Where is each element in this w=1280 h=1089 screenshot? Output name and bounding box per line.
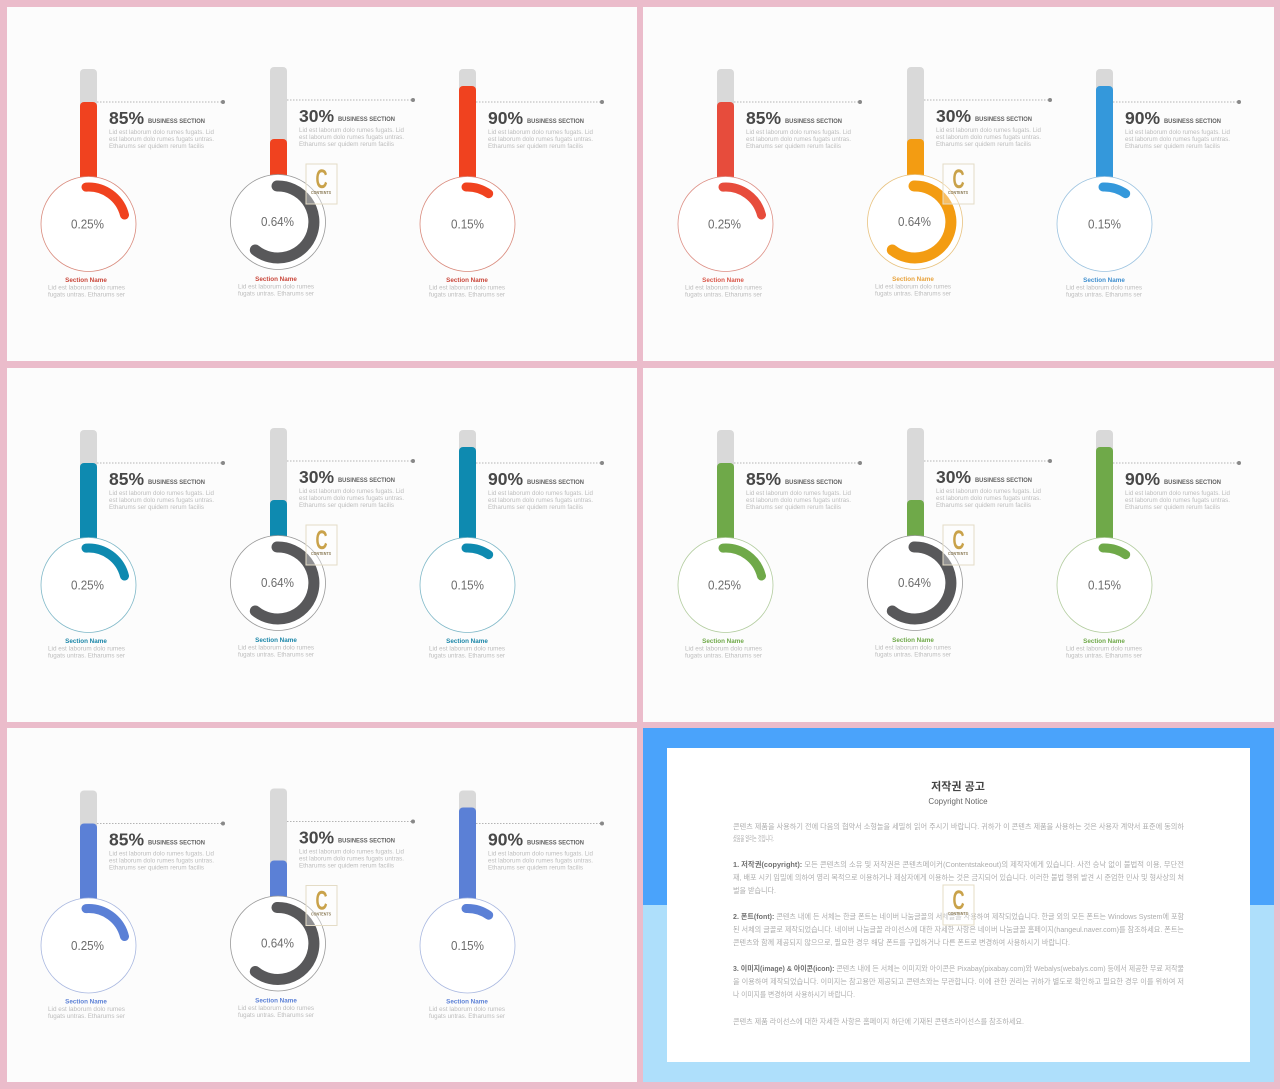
section caption: Section Name	[702, 638, 744, 645]
section caption	[875, 276, 951, 298]
thermometer tube	[1096, 430, 1113, 542]
stat text: Lid est laborum dolo rumes fugats. Lid	[488, 129, 593, 136]
gauge: 90%	[1057, 69, 1241, 298]
section caption: fugats untras. Etharums ser	[238, 652, 314, 658]
stat text: Lid est laborum dolo rumes fugats. Lid	[936, 488, 1041, 495]
clause 1: 1. 저작권(copyright): 모든 콘텐츠의 소유 및 저작권은 콘텐츠메이커(Contentstakeout)의 제작자에게 있습니다. 사전 승낙 없이 불법적 이용, 무단전	[733, 860, 1184, 869]
section caption: fugats untras. Etharums ser	[875, 290, 951, 298]
thermometer tube	[907, 428, 924, 540]
section caption: Section Name	[446, 998, 488, 1006]
stat text: Etharums ser quidem rerum facilis	[299, 141, 394, 148]
panel: teal slide	[7, 368, 637, 722]
stat text	[936, 106, 1041, 148]
stat text: Lid est laborum dolo rumes fugats. Lid	[1125, 490, 1230, 497]
section caption	[1066, 277, 1142, 298]
stat text: 85%	[109, 108, 144, 128]
stat text: est laborum dolo rumes fugats untras.	[488, 497, 593, 504]
stat text	[109, 469, 214, 511]
gauge: 90%	[1057, 430, 1241, 660]
dial: 0.25%	[71, 578, 104, 592]
section caption: Lid est laborum dolo rumes	[685, 646, 762, 652]
section caption: fugats untras. Etharums ser	[1066, 292, 1142, 298]
stat text: est laborum dolo rumes fugats untras.	[299, 495, 404, 502]
section caption	[685, 277, 762, 298]
dial: 0.15%	[1088, 578, 1121, 592]
stat text	[488, 469, 593, 511]
gauge: 30%	[230, 428, 415, 658]
stat text: Lid est laborum dolo rumes fugats. Lid	[746, 490, 851, 497]
section caption: Section Name	[65, 638, 107, 645]
section caption: Section Name	[702, 277, 744, 284]
stat text: BUSINESS SECTION	[785, 480, 842, 486]
section caption: Section Name	[65, 277, 107, 284]
stat text	[488, 108, 593, 150]
intro paragraph	[733, 822, 1184, 843]
stat text: Lid est laborum dolo rumes fugats. Lid	[488, 490, 593, 497]
section caption	[48, 277, 125, 298]
thermometer tube	[270, 788, 287, 900]
section caption: Section Name	[255, 637, 297, 644]
dial: 0.25%	[71, 216, 104, 232]
stat text: BUSINESS SECTION	[338, 478, 395, 484]
dial	[420, 176, 515, 272]
dial: 0.64%	[261, 575, 294, 590]
stat text: 85%	[746, 469, 781, 489]
stat text: 30%	[936, 467, 971, 487]
stat text: 90%	[488, 830, 523, 850]
watermark badge	[306, 885, 337, 926]
section caption: fugats untras. Etharums ser	[685, 652, 762, 660]
heading: Copyright Notice	[928, 797, 988, 806]
dial	[868, 174, 962, 270]
watermark badge: CONTENTS	[311, 912, 331, 916]
panel: indigo slide	[7, 728, 637, 1082]
dial: 0.25%	[708, 216, 741, 232]
section caption: Lid est laborum dolo rumes	[238, 284, 314, 290]
dotted leader	[476, 461, 604, 465]
panel: copyright notice	[643, 728, 1274, 1082]
dial	[230, 536, 326, 630]
section caption: Section Name	[892, 276, 934, 283]
clause 2: 된 서체의 글꼴로 제작되었습니다. 네이버 나눔글꼴 라이선스에 대한 자세한 사항은 네이버 나눔글꼴 홈페이지(hangeul.naver.com)를 참조하세요. 폰트는	[733, 925, 1184, 934]
dotted leader	[734, 100, 862, 104]
section caption	[238, 276, 314, 298]
section caption: Lid est laborum dolo rumes	[48, 646, 125, 652]
thermometer tube	[907, 67, 924, 179]
stat text: BUSINESS SECTION	[527, 480, 584, 486]
section caption	[429, 998, 505, 1020]
stat text: Lid est laborum dolo rumes fugats. Lid	[109, 850, 214, 858]
section caption: Lid est laborum dolo rumes	[875, 644, 951, 652]
dial: 0.64%	[898, 214, 931, 229]
intro paragraph: 콘텐츠 제품을 사용하기 전에 다음의 협약서 소형놀을 세밀히 읽어 주시기 바랍니다. 귀하가 이 콘텐츠 제품을 사용하는 것은 사용자 계약서 표준에 동의하	[733, 822, 1184, 831]
gauge: 30%	[230, 788, 415, 1019]
section caption: Lid est laborum dolo rumes	[429, 1006, 505, 1013]
intro paragraph: 셨음을 알리는 것입니다.	[733, 834, 774, 843]
watermark badge	[306, 525, 337, 565]
watermark badge: C	[952, 164, 965, 194]
section caption: Lid est laborum dolo rumes	[1066, 646, 1142, 652]
section caption: fugats untras. Etharums ser	[48, 1013, 125, 1020]
stat text: Etharums ser quidem rerum facilis	[299, 862, 394, 870]
stat text: est laborum dolo rumes fugats untras.	[109, 858, 214, 864]
watermark badge: C	[316, 885, 328, 916]
stat text: Etharums ser quidem rerum facilis	[299, 502, 394, 509]
clause 2	[733, 912, 1184, 947]
stat text: BUSINESS SECTION	[338, 838, 395, 844]
dial	[230, 896, 326, 991]
watermark badge: CONTENTS	[311, 190, 331, 195]
stat text: BUSINESS SECTION	[148, 840, 205, 846]
section caption	[238, 998, 314, 1019]
clause 1: 재, 배포 시키 임밀에 의하여 영리 목적으로 이용하거나 제삼자에게 이용하는 것은 금지되어 있습니다. 이러한 불법 행위 발견 시 준엄한 민사 및 형사상의 처	[733, 873, 1184, 882]
section caption: Section Name	[1083, 638, 1125, 645]
dotted leader	[1113, 100, 1241, 104]
section caption: fugats untras. Etharums ser	[238, 1012, 314, 1019]
section caption: Section Name	[255, 998, 297, 1004]
stat text	[109, 108, 214, 150]
stat text: est laborum dolo rumes fugats untras.	[746, 136, 851, 143]
watermark badge	[306, 164, 337, 204]
stat text: 90%	[1125, 469, 1160, 489]
stat text	[936, 467, 1041, 509]
section caption: fugats untras. Etharums ser	[48, 292, 125, 298]
stat text	[746, 108, 851, 150]
stat text: est laborum dolo rumes fugats untras.	[299, 134, 404, 141]
thermometer tube	[459, 790, 476, 902]
dial	[868, 536, 962, 630]
section caption: Lid est laborum dolo rumes	[238, 1005, 314, 1012]
stat text: est laborum dolo rumes fugats untras.	[936, 495, 1041, 502]
section caption: fugats untras. Etharums ser	[238, 290, 314, 298]
section caption: fugats untras. Etharums ser	[875, 652, 951, 658]
stat text: BUSINESS SECTION	[148, 119, 205, 125]
watermark badge	[943, 525, 974, 565]
section caption	[429, 638, 505, 660]
stat text: 90%	[488, 469, 523, 489]
dotted leader	[1113, 461, 1241, 465]
stat text	[299, 106, 404, 148]
gauge: 85%	[678, 69, 862, 298]
watermark badge: CONTENTS	[948, 551, 968, 556]
watermark badge: CONTENTS	[311, 551, 331, 556]
stat text: Lid est laborum dolo rumes fugats. Lid	[1125, 129, 1230, 136]
stat text: 85%	[746, 108, 781, 128]
stat text: Etharums ser quidem rerum facilis	[746, 504, 841, 511]
dotted leader	[287, 820, 415, 824]
clause 3: 나 이미지를 변경하여 사용하시기 바랍니다.	[733, 990, 855, 999]
section caption: Lid est laborum dolo rumes	[429, 646, 505, 652]
stat text: BUSINESS SECTION	[527, 840, 584, 846]
stat text: Lid est laborum dolo rumes fugats. Lid	[299, 127, 404, 134]
gauge: 90%	[420, 69, 604, 298]
stat text: BUSINESS SECTION	[1164, 119, 1221, 125]
dial	[420, 538, 515, 632]
stat text: Etharums ser quidem rerum facilis	[109, 864, 204, 872]
stat text: BUSINESS SECTION	[527, 119, 584, 125]
clause 3: 을 이용하여 제작되었습니다. 이미지는 참고용만 제공되고 콘텐츠와는 무관합니다. 이에 관한 권리는 귀하가 별도로 확인하고 필요한 경우 이를 위하여 저	[733, 977, 1184, 986]
dotted leader	[97, 100, 225, 104]
section caption: Lid est laborum dolo rumes	[1066, 284, 1142, 292]
stat text: Etharums ser quidem rerum facilis	[488, 504, 583, 511]
thermometer tube	[80, 430, 97, 542]
clause 2: 콘텐츠와 함께 제공되지 않으므로, 필요한 경우 해당 폰트를 구입하거나 다른 폰트로 변경하여 사용하시기 바랍니다.	[733, 938, 1070, 947]
clause 1	[733, 860, 1184, 895]
stat text: est laborum dolo rumes fugats untras.	[936, 134, 1041, 141]
stat text: est laborum dolo rumes fugats untras.	[488, 136, 593, 143]
section caption: Lid est laborum dolo rumes	[48, 284, 125, 292]
heading	[928, 779, 988, 806]
section caption: Section Name	[65, 998, 107, 1006]
section caption: Section Name	[1083, 277, 1125, 284]
stat text: 30%	[936, 106, 971, 126]
dotted leader	[287, 98, 415, 102]
dotted leader	[734, 461, 862, 465]
stat text: 30%	[299, 467, 334, 487]
stat text: est laborum dolo rumes fugats untras.	[488, 858, 593, 864]
section caption	[238, 637, 314, 658]
stat text: Lid est laborum dolo rumes fugats. Lid	[746, 129, 851, 136]
stat text: Lid est laborum dolo rumes fugats. Lid	[109, 129, 214, 136]
clause 2: 2. 폰트(font): 콘텐츠 내에 든 서체는 한글 폰트는 네이버 나눔글꼴의 서체들을 사용하여 제작되었습니다. 한글 외의 모든 폰트는 Windows System에 포함	[733, 912, 1184, 921]
stat text: Etharums ser quidem rerum facilis	[109, 143, 204, 150]
dial: 0.15%	[451, 216, 484, 232]
dotted leader	[476, 822, 604, 826]
stat text: Lid est laborum dolo rumes fugats. Lid	[299, 488, 404, 495]
stat text	[746, 469, 851, 511]
stat text	[1125, 469, 1230, 511]
section caption	[429, 277, 505, 298]
gauge: 30%	[868, 67, 1052, 298]
section caption: Section Name	[255, 276, 297, 283]
stat text: 90%	[1125, 108, 1160, 128]
clause 3	[733, 964, 1184, 999]
dial	[1057, 176, 1152, 272]
stat text: Etharums ser quidem rerum facilis	[936, 502, 1031, 509]
stat text	[299, 828, 404, 870]
section caption: Lid est laborum dolo rumes	[429, 284, 505, 292]
gauge: 30%	[230, 67, 415, 298]
section caption: fugats untras. Etharums ser	[429, 292, 505, 298]
dial: 0.64%	[898, 575, 931, 590]
dotted leader	[924, 98, 1052, 102]
panel: green slide	[643, 368, 1274, 722]
thermometer tube	[459, 69, 476, 181]
stat text: Etharums ser quidem rerum facilis	[1125, 504, 1220, 511]
dial	[41, 538, 136, 632]
thermometer tube	[80, 69, 97, 181]
dial: 0.15%	[1088, 216, 1121, 232]
stat text: BUSINESS SECTION	[975, 478, 1032, 484]
dial	[41, 176, 136, 272]
watermark badge: C	[316, 525, 328, 555]
watermark badge: C	[952, 885, 965, 915]
gauge: 30%	[868, 428, 1052, 658]
stat text: est laborum dolo rumes fugats untras.	[746, 497, 851, 504]
thermometer tube	[270, 428, 287, 540]
dotted leader	[287, 459, 415, 463]
thermometer tube	[270, 67, 287, 179]
thermometer tube	[717, 69, 734, 181]
dial	[1057, 538, 1152, 632]
stat text: Etharums ser quidem rerum facilis	[488, 864, 583, 872]
clause 3: 3. 이미지(image) & 아이콘(icon): 콘텐츠 내에 든 서체는 이미지와 아이콘은 Pixabay(pixabay.com)와 Webalys(webalys.com) 등에서 제공한 무료 저작물	[733, 964, 1184, 973]
section caption: Lid est laborum dolo rumes	[685, 284, 762, 292]
section caption: Section Name	[446, 277, 488, 284]
stat text: BUSINESS SECTION	[975, 117, 1032, 123]
section caption: fugats untras. Etharums ser	[429, 1013, 505, 1020]
stat text: Etharums ser quidem rerum facilis	[1125, 143, 1220, 150]
gauge: 90%	[420, 430, 604, 660]
panel: multicolor slide	[643, 7, 1274, 361]
stat text: est laborum dolo rumes fugats untras.	[1125, 136, 1230, 143]
gauge: 85%	[41, 430, 225, 660]
dial: 0.15%	[451, 938, 484, 953]
stat text: Lid est laborum dolo rumes fugats. Lid	[936, 127, 1041, 134]
dial	[41, 898, 136, 993]
section caption: Section Name	[446, 638, 488, 645]
stat text: BUSINESS SECTION	[338, 117, 395, 123]
dial	[678, 538, 773, 632]
dial: 0.64%	[261, 214, 294, 229]
stat text: Etharums ser quidem rerum facilis	[488, 143, 583, 150]
watermark badge: CONTENTS	[948, 190, 968, 195]
dial: 0.64%	[261, 936, 294, 950]
section caption	[685, 638, 762, 660]
stat text: BUSINESS SECTION	[148, 480, 205, 486]
stat text: 85%	[109, 469, 144, 489]
dial	[420, 898, 515, 993]
thermometer tube	[459, 430, 476, 542]
thermometer tube	[80, 790, 97, 902]
stat text: est laborum dolo rumes fugats untras.	[299, 856, 404, 862]
thermometer tube	[717, 430, 734, 542]
stat text: Etharums ser quidem rerum facilis	[936, 141, 1031, 148]
clause 1: 벌을 받습니다.	[733, 886, 776, 895]
dotted leader	[97, 461, 225, 465]
dotted leader	[476, 100, 604, 104]
stat text: BUSINESS SECTION	[785, 119, 842, 125]
gauge: 85%	[41, 69, 225, 298]
watermark badge	[943, 164, 974, 204]
watermark badge	[943, 885, 974, 925]
section caption: Lid est laborum dolo rumes	[238, 644, 314, 652]
closing note: 콘텐츠 제품 라이선스에 대한 자세한 사항은 홈페이지 하단에 기재된 콘텐츠라이선스를 참조하세요.	[733, 1017, 1024, 1026]
stat text: 90%	[488, 108, 523, 128]
gauge: 90%	[420, 790, 604, 1020]
section caption: Lid est laborum dolo rumes	[875, 284, 951, 290]
heading: 저작권 공고	[931, 779, 985, 793]
section caption: fugats untras. Etharums ser	[48, 652, 125, 660]
dial	[678, 176, 773, 272]
section caption	[1066, 638, 1142, 660]
watermark badge: CONTENTS	[948, 911, 968, 916]
dial: 0.15%	[451, 578, 484, 592]
stat text: 85%	[109, 830, 144, 850]
stat text: 30%	[299, 106, 334, 126]
stat text	[488, 830, 593, 872]
stat text: est laborum dolo rumes fugats untras.	[109, 136, 214, 143]
dial	[230, 174, 326, 270]
section caption: fugats untras. Etharums ser	[685, 292, 762, 298]
section caption: Lid est laborum dolo rumes	[48, 1006, 125, 1013]
dotted leader	[97, 822, 225, 826]
stat text: Lid est laborum dolo rumes fugats. Lid	[488, 850, 593, 858]
section caption: Section Name	[892, 637, 934, 644]
stat text: 30%	[299, 828, 334, 848]
gauge: 85%	[41, 790, 225, 1020]
stat text: est laborum dolo rumes fugats untras.	[1125, 497, 1230, 504]
stat text: Lid est laborum dolo rumes fugats. Lid	[109, 490, 214, 497]
section caption	[48, 998, 125, 1020]
stat text: Etharums ser quidem rerum facilis	[746, 143, 841, 150]
stat text: est laborum dolo rumes fugats untras.	[109, 497, 214, 504]
thermometer tube	[1096, 69, 1113, 181]
section caption	[48, 638, 125, 660]
dotted leader	[924, 459, 1052, 463]
section caption: fugats untras. Etharums ser	[429, 652, 505, 660]
gauge: 85%	[678, 430, 862, 660]
stat text	[299, 467, 404, 509]
stat text	[1125, 108, 1230, 150]
watermark badge: C	[316, 164, 328, 194]
stat text	[109, 830, 214, 872]
stat text: Lid est laborum dolo rumes fugats. Lid	[299, 848, 404, 856]
panel: red slide	[7, 7, 637, 361]
dial: 0.25%	[71, 938, 104, 953]
watermark badge: C	[952, 525, 965, 555]
section caption: fugats untras. Etharums ser	[1066, 652, 1142, 660]
stat text: BUSINESS SECTION	[1164, 480, 1221, 486]
stat text: Etharums ser quidem rerum facilis	[109, 504, 204, 511]
section caption	[875, 637, 951, 658]
dial: 0.25%	[708, 578, 741, 592]
